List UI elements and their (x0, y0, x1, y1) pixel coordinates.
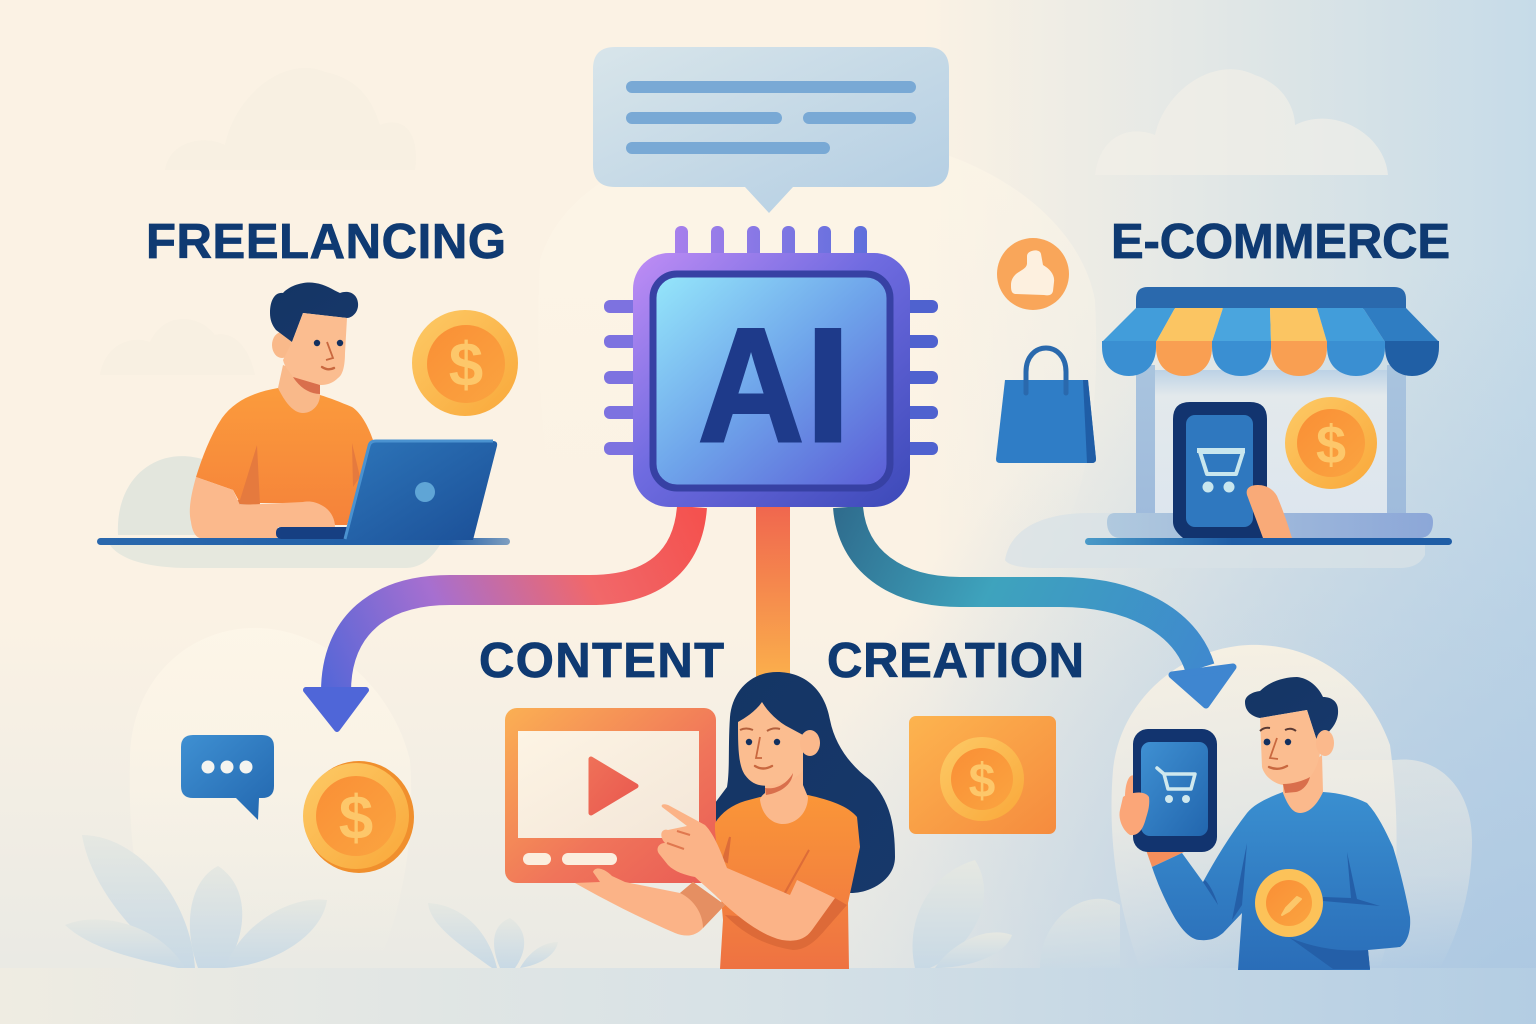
video screen (518, 731, 699, 838)
customer neck shadow (1283, 777, 1310, 793)
coin: lower left: $ (339, 784, 373, 853)
coin: lower left (303, 761, 414, 873)
storefront illustration (1085, 287, 1452, 545)
heading: content: CONTENT (479, 634, 724, 688)
icon: chat bubble (181, 735, 274, 820)
customer neck (1283, 755, 1323, 813)
video panel (505, 708, 716, 883)
background clouds and blobs (100, 68, 1472, 968)
creator supporting arm (575, 869, 725, 936)
store phone (1173, 402, 1267, 538)
store awning (1102, 308, 1439, 376)
heading: e-commerce: E-COMMERCE (1111, 215, 1450, 269)
customer cart icon (1157, 768, 1195, 803)
video controls (523, 853, 617, 865)
chip screen (653, 274, 890, 488)
creator neck (760, 757, 808, 824)
freelancer neck (278, 365, 320, 413)
freelancer neck shadow (293, 377, 320, 394)
speech bubble (593, 47, 949, 213)
freelancer arm (190, 477, 335, 538)
freelancer face (283, 313, 347, 385)
store window (1155, 370, 1387, 515)
icon: shopping bag (996, 348, 1096, 463)
chip label: I (805, 295, 851, 476)
speech bubble text lines (632, 87, 910, 148)
customer features (1260, 728, 1296, 769)
freelancer illustration (97, 282, 510, 545)
store counter (1107, 513, 1433, 538)
store roof bar (1136, 287, 1406, 309)
freelancer hair (270, 282, 358, 342)
creator shirt (715, 795, 860, 969)
creator shirt shadows (723, 837, 847, 950)
creator pointing arm (658, 804, 835, 941)
customer sweater folds (1203, 843, 1380, 969)
freelancer shirt (196, 388, 373, 525)
arrow: to content creation (756, 505, 790, 685)
creator face (738, 702, 803, 786)
coin panel (909, 716, 1056, 834)
customer coin (1255, 869, 1323, 937)
content creator illustration (505, 672, 895, 969)
store hand (1247, 485, 1292, 538)
store coin: $ (1316, 415, 1346, 475)
creator ear (800, 730, 820, 756)
coin: freelancing: $ (449, 331, 483, 400)
chip pins (604, 226, 938, 455)
store columns (1136, 365, 1406, 515)
heading: creation: CREATION (827, 634, 1084, 688)
customer hair (1245, 677, 1338, 741)
store coin (1285, 397, 1377, 489)
chip label: A (698, 295, 804, 476)
coin panel: $ (969, 755, 996, 808)
heading: freelancing: FREELANCING (146, 215, 506, 269)
customer thumb (1125, 775, 1142, 800)
creator elbow shade (680, 882, 725, 928)
icon: thumbs up badge (997, 238, 1069, 310)
creator hair (715, 672, 895, 893)
AI chip (604, 226, 938, 507)
laptop camera dot (415, 482, 435, 502)
customer phone (1133, 729, 1217, 852)
store ground line (1085, 538, 1452, 545)
desk line (97, 538, 510, 545)
customer head (1260, 710, 1320, 785)
freelancer features (314, 340, 343, 369)
arrow: to e-commerce customer (848, 507, 1233, 705)
customer fingers (1119, 792, 1149, 835)
laptop base (276, 527, 351, 539)
creator features (740, 728, 780, 768)
arrow: to freelancing income (306, 507, 692, 729)
customer illustration (1119, 677, 1410, 970)
coin: freelancing (412, 310, 518, 416)
background leaves (65, 835, 1120, 968)
store cart icon (1197, 448, 1245, 492)
freelancer shirt folds (220, 443, 360, 505)
freelancer ear (272, 332, 292, 358)
chip body (633, 253, 910, 507)
customer wrist (1146, 850, 1184, 867)
creator finger lines (667, 831, 690, 849)
creator neck shadow (765, 773, 793, 795)
laptop edge highlight (345, 441, 493, 539)
customer ear (1316, 730, 1334, 756)
customer sweater (1152, 792, 1410, 970)
play icon (591, 759, 636, 813)
laptop screen (345, 441, 497, 540)
